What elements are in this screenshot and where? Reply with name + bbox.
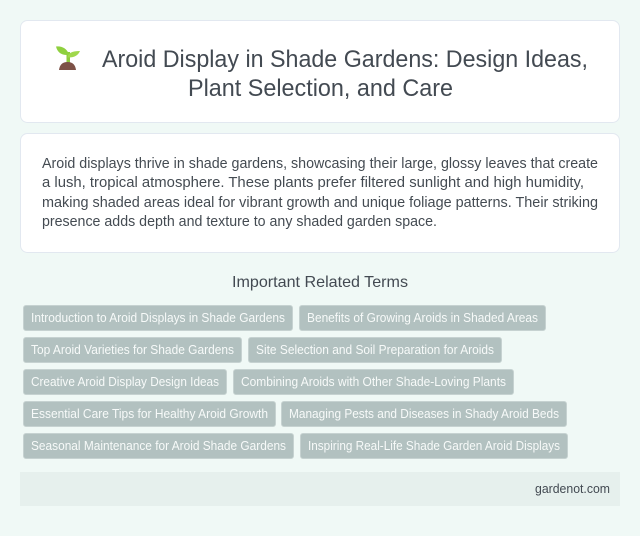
description text: making shaded areas ideal for vibrant growth and unique foliage patterns. Their striking bbox=[42, 195, 598, 211]
footer bbox=[20, 472, 620, 506]
tag bbox=[300, 434, 568, 458]
heading: related terms: Important Related Terms bbox=[232, 274, 408, 291]
description text: a lush, tropical atmosphere. These plants prefer filtered sunlight and high humidity, bbox=[42, 175, 584, 191]
tag: Combining Aroids with Other Shade-Loving Plants bbox=[241, 375, 506, 389]
description text: presence adds depth and texture to any shaded garden space. bbox=[42, 214, 437, 230]
tag list bbox=[24, 306, 568, 458]
tag: Managing Pests and Diseases in Shady Aroid Beds bbox=[289, 407, 559, 421]
description text: Aroid displays thrive in shade gardens, showcasing their large, glossy leaves that create bbox=[42, 156, 598, 172]
tag bbox=[24, 402, 276, 426]
tag bbox=[234, 370, 514, 394]
tag bbox=[24, 370, 226, 394]
tag bbox=[24, 306, 292, 330]
tag: Top Aroid Varieties for Shade Gardens bbox=[31, 343, 234, 357]
tag: Essential Care Tips for Healthy Aroid Growth bbox=[31, 407, 268, 421]
footer: gardenot.com bbox=[535, 482, 610, 496]
panel: title card bbox=[20, 20, 620, 122]
title: Aroid Display in Shade Gardens: Design Ideas, bbox=[102, 46, 588, 73]
tag: Seasonal Maintenance for Aroid Shade Gardens bbox=[31, 439, 286, 453]
tag bbox=[300, 306, 546, 330]
tag: Creative Aroid Display Design Ideas bbox=[31, 375, 219, 389]
tag bbox=[248, 338, 502, 362]
title bbox=[102, 46, 588, 102]
tag: Site Selection and Soil Preparation for Aroids bbox=[256, 343, 494, 357]
tag: Introduction to Aroid Displays in Shade Gardens bbox=[31, 311, 285, 325]
tag: Benefits of Growing Aroids in Shaded Areas bbox=[307, 311, 538, 325]
tag: Inspiring Real-Life Shade Garden Aroid Displays bbox=[308, 439, 560, 453]
description text bbox=[42, 156, 598, 230]
tag bbox=[282, 402, 566, 426]
title: Plant Selection, and Care bbox=[188, 75, 453, 102]
icon: seedling bbox=[56, 46, 80, 70]
panel: description bbox=[20, 134, 620, 252]
tag bbox=[24, 338, 242, 362]
tag bbox=[24, 434, 294, 458]
